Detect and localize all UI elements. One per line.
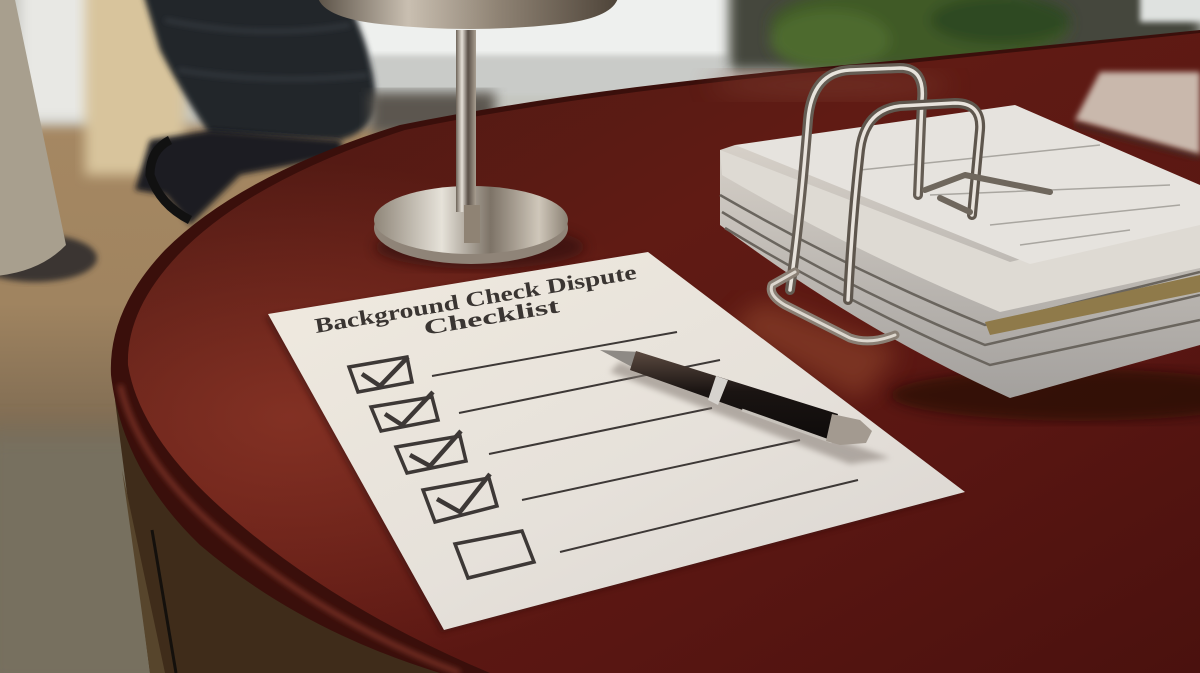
- desk lamp: [318, 0, 618, 269]
- checklist sheet: [265, 252, 965, 633]
- sheet title: Background Check Dispute: [313, 260, 638, 338]
- desk side: [115, 400, 480, 673]
- sheet title: Checklist: [422, 293, 561, 340]
- office chair: [135, 0, 495, 225]
- pen: [600, 350, 890, 464]
- floor lamp cone at left: [0, 0, 97, 282]
- paper stack: [720, 105, 1200, 421]
- sheet title: [313, 260, 638, 340]
- checkbox rows: [349, 332, 858, 578]
- plant: [770, 0, 1070, 70]
- metal clip holder: [771, 68, 1050, 341]
